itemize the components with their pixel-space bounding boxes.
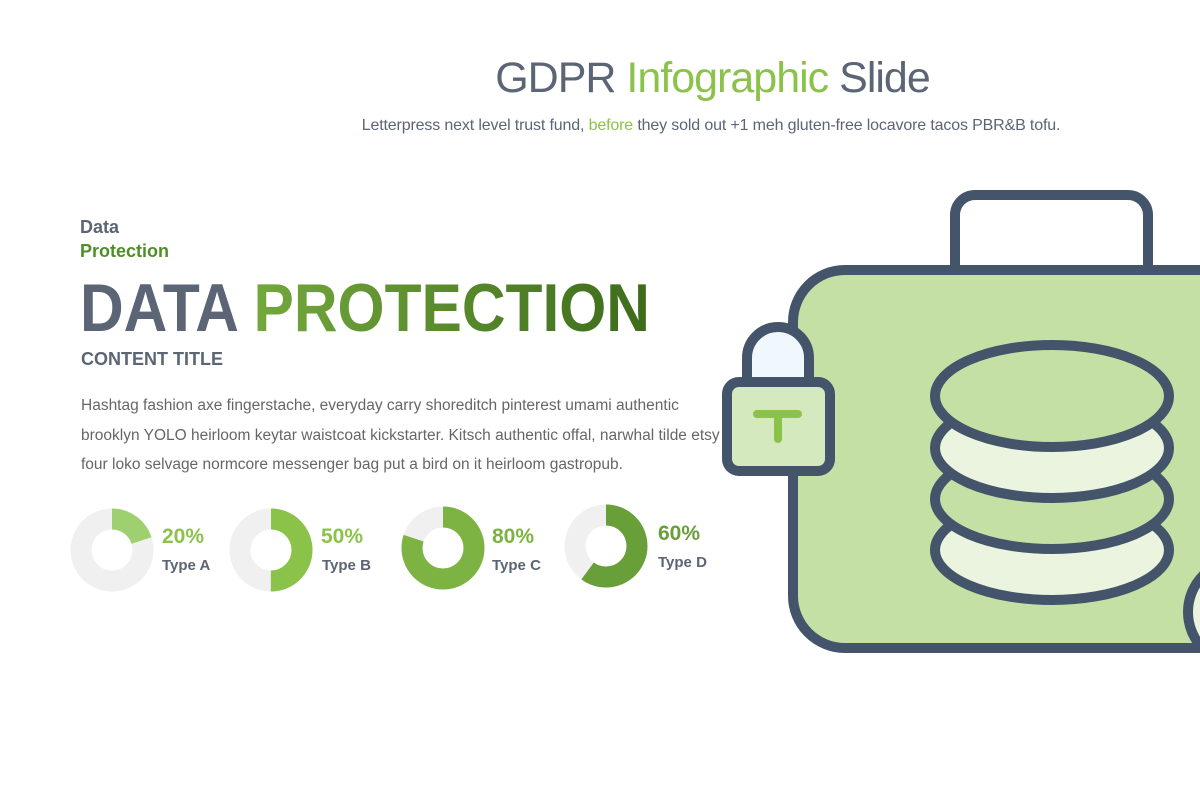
donut C: Type C	[492, 557, 541, 574]
small heading: Data	[80, 217, 119, 237]
handle	[955, 195, 1148, 272]
subtitle: Letterpress next level trust fund, before they sold out +1 meh gluten-free locavore tacos PBR&B tofu.	[362, 117, 1060, 134]
content title: CONTENT TITLE	[81, 349, 223, 369]
paragraph	[81, 397, 720, 473]
donut D	[575, 515, 707, 577]
paragraph: Hashtag fashion axe fingerstache, everyday carry shoreditch pinterest umami authentic	[81, 397, 679, 414]
donut charts	[70, 504, 707, 592]
corner circle	[1188, 560, 1200, 664]
donut B: Type B	[322, 557, 371, 574]
illustration: briefcase with database and lock	[722, 190, 1200, 653]
case body	[793, 270, 1200, 648]
donut A: 20%	[162, 525, 204, 548]
donut A: Type A	[162, 557, 211, 574]
paragraph: four loko selvage normcore messenger bag put a bird on it heirloom gastropub.	[81, 456, 623, 473]
donut D: 60%	[658, 522, 700, 545]
lock	[727, 327, 830, 471]
small heading	[80, 217, 169, 261]
donut A	[81, 519, 211, 581]
paragraph: brooklyn YOLO heirloom keytar waistcoat kickstarter. Kitsch authentic offal, narwhal tilde etsy	[81, 426, 720, 444]
donut C: 80%	[492, 525, 534, 548]
donut B	[240, 519, 371, 581]
title: GDPR Infographic Slide	[495, 54, 930, 102]
database stack	[935, 345, 1169, 600]
donut C	[412, 517, 541, 579]
donut D: Type D	[658, 554, 707, 571]
small heading: Protection	[80, 241, 169, 261]
donut B: 50%	[321, 525, 363, 548]
